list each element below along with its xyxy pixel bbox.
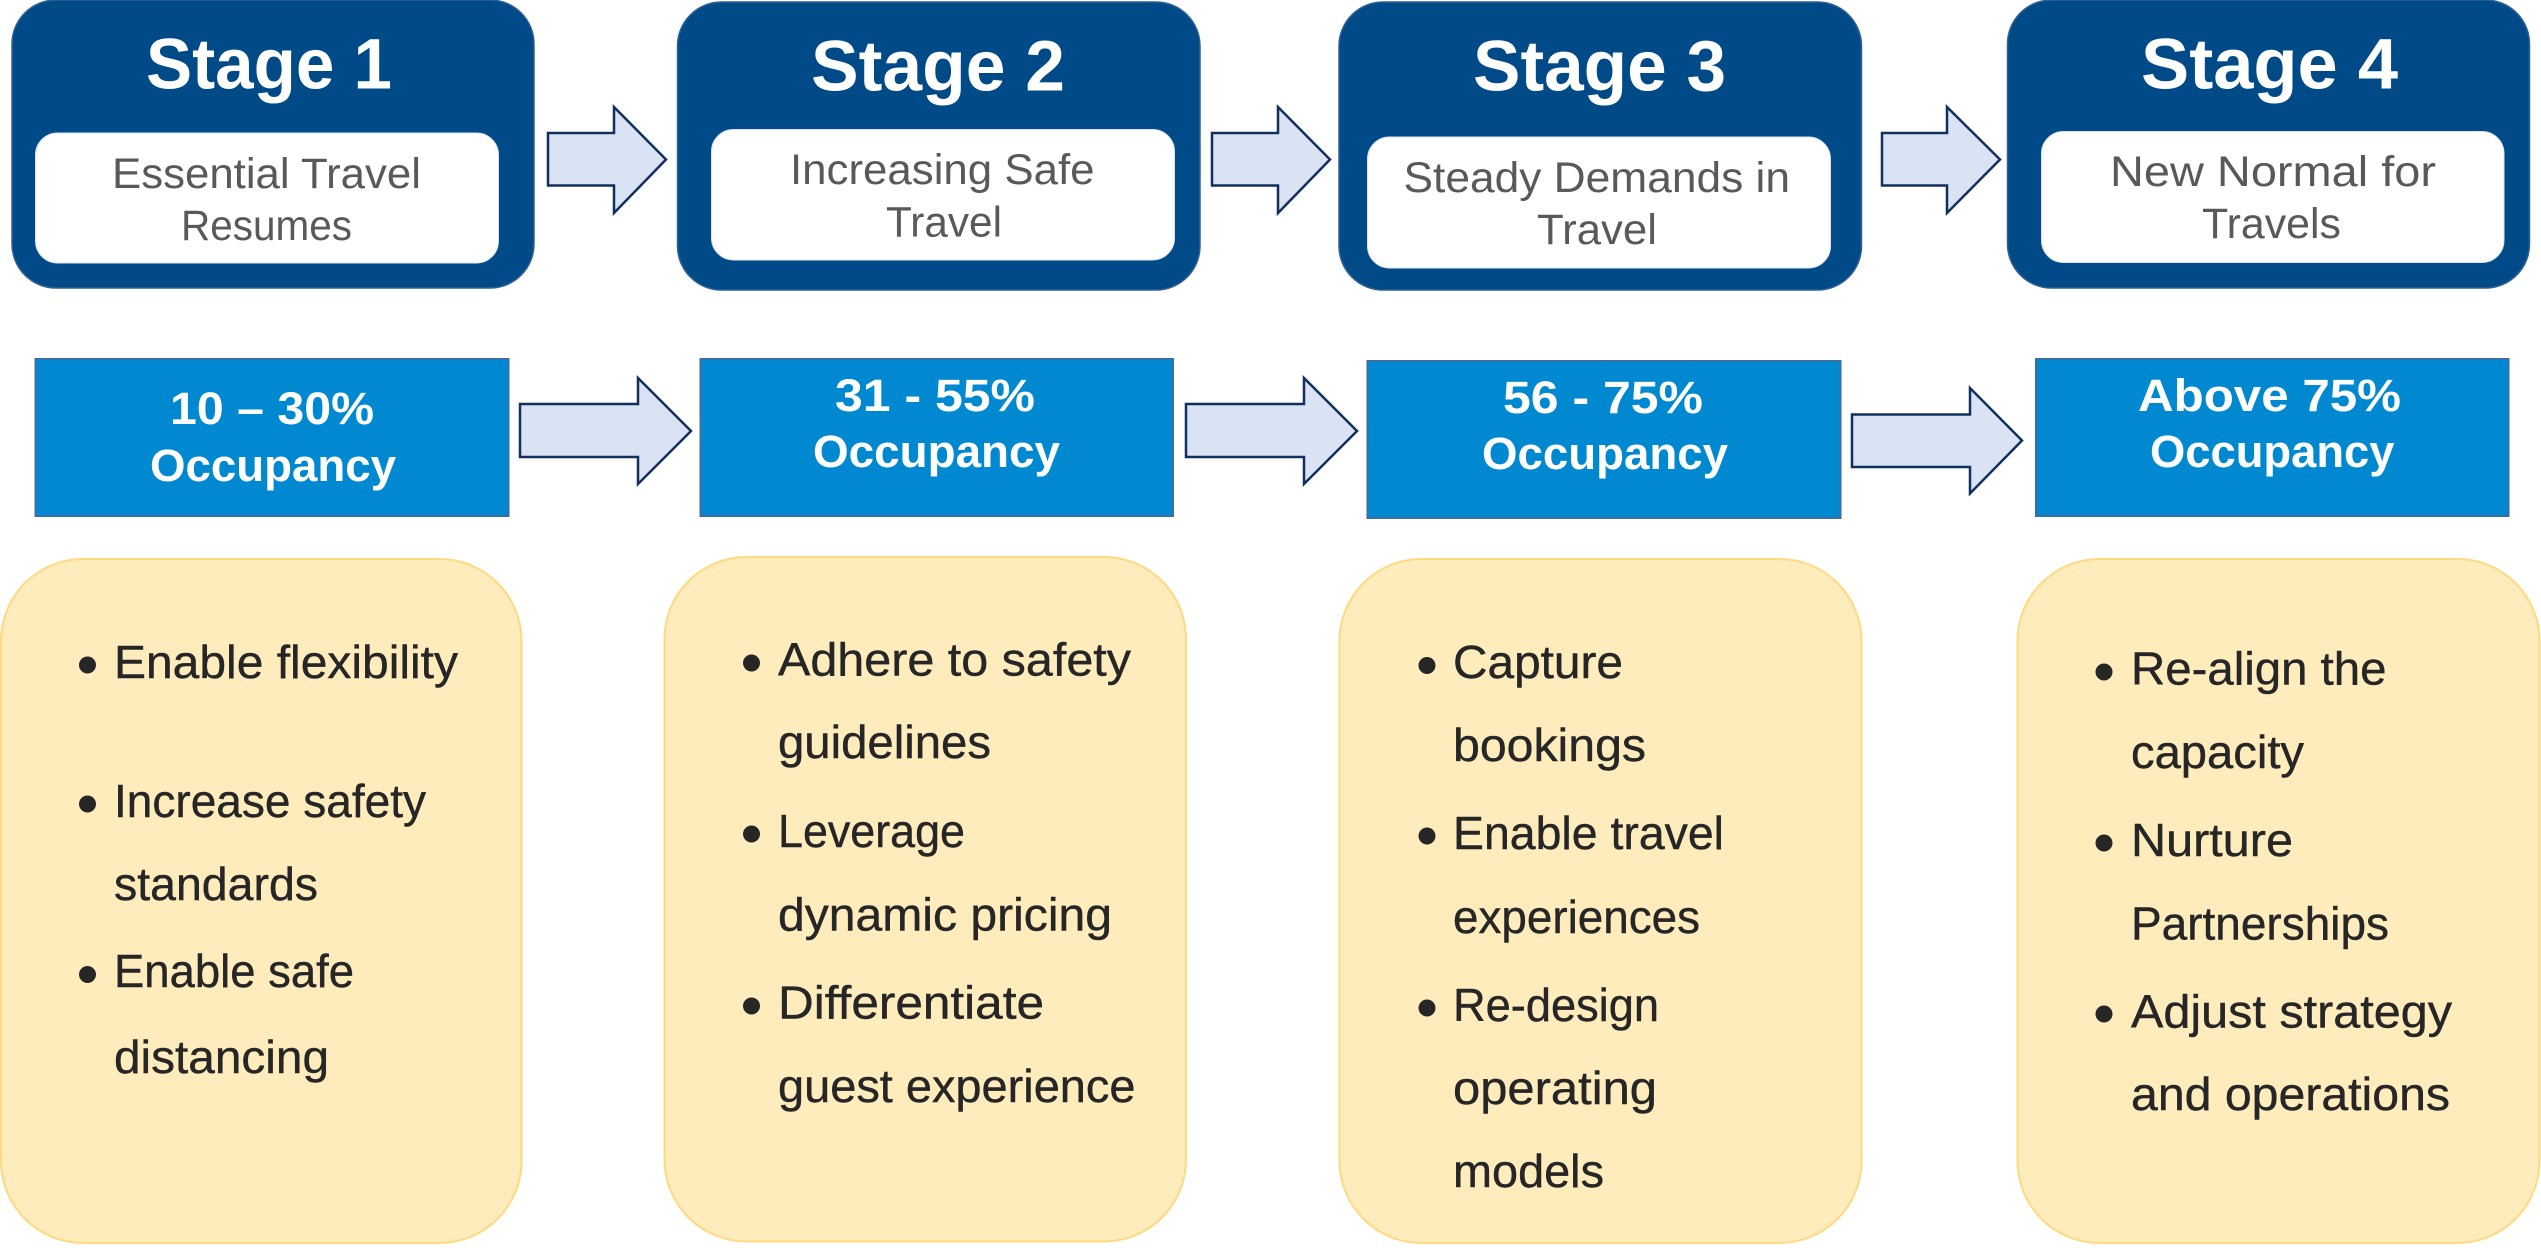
bullet: capture bookings xyxy=(1418,636,1646,771)
bullet: capture bookings: bookings xyxy=(1453,719,1646,771)
heading: stage 2: Stage 2 xyxy=(811,28,1065,106)
bullet: adjust strategy and operations: and operations xyxy=(2131,1068,2450,1120)
bullet: adhere to safety guidelines: Adhere to safety xyxy=(778,634,1131,686)
occupancy box: stage 2: 31 - 55% xyxy=(835,370,1035,421)
bullet: adjust strategy and operations: Adjust strategy xyxy=(2131,986,2452,1038)
subtitle card: stage 4: Travels xyxy=(2202,200,2341,248)
subtitle card: stage 4 xyxy=(2042,132,2504,262)
arrow: occupancy 2 to 3 xyxy=(1186,378,1357,484)
subtitle card: stage 2: Increasing Safe xyxy=(790,146,1094,194)
arrow: stage 1 to stage 2 xyxy=(548,107,666,213)
occupancy box: stage 1 xyxy=(36,359,508,516)
bullet: increase safety standards: standards xyxy=(114,858,318,910)
bullet: enable travel experiences: experiences xyxy=(1453,891,1700,943)
panel: stage 2 header xyxy=(678,2,1200,290)
bullet: enable travel experiences: Enable travel xyxy=(1453,807,1724,859)
occupancy box: stage 2 xyxy=(700,359,1173,516)
panel: stage 4 header xyxy=(2008,0,2530,288)
bullet: differentiate guest experience: Differentiate xyxy=(778,976,1044,1028)
bullet: re-design operating models: Re-design xyxy=(1453,979,1659,1031)
occupancy box: stage 4 xyxy=(2036,359,2508,516)
bullet: differentiate guest experience: guest experience xyxy=(778,1060,1136,1112)
panel: stage 2 actions xyxy=(664,557,1186,1242)
bullet: re-design operating models: models xyxy=(1453,1145,1604,1197)
bullet: re-align the capacity xyxy=(2096,642,2386,778)
occupancy box: stage 3: Occupancy xyxy=(1482,428,1728,479)
subtitle card: stage 2 xyxy=(712,130,1174,260)
panel: stage 3 header xyxy=(1339,2,1862,290)
subtitle card: stage 3: Steady Demands in xyxy=(1404,154,1790,202)
bullet: enable safe distancing: Enable safe xyxy=(114,945,354,997)
bullet: re-design operating models: operating xyxy=(1453,1062,1657,1114)
bullet: re-align the capacity: Re-align the xyxy=(2131,642,2386,694)
bullet: re-align the capacity: capacity xyxy=(2131,726,2304,778)
panel: stage 4 actions xyxy=(2018,559,2540,1243)
heading: stage 1: Stage 1 xyxy=(146,26,392,104)
bullet: re-design operating models xyxy=(1418,979,1659,1197)
arrow: stage 2 to stage 3 xyxy=(1212,107,1330,213)
bullet: enable travel experiences xyxy=(1418,807,1724,943)
occupancy box: stage 1: 10 – 30% xyxy=(170,383,374,434)
panel: stage 1 header xyxy=(12,0,534,288)
bullet: adhere to safety guidelines xyxy=(743,634,1131,768)
heading: stage 4: Stage 4 xyxy=(2141,26,2399,104)
bullet: increase safety standards xyxy=(79,775,426,910)
bullet: nurture partnerships: Partnerships xyxy=(2131,898,2389,950)
bullet: differentiate guest experience xyxy=(743,976,1136,1112)
subtitle card: stage 3 xyxy=(1368,137,1830,268)
bullet: enable safe distancing: distancing xyxy=(114,1031,329,1083)
occupancy box: stage 4: Occupancy xyxy=(2150,426,2394,477)
occupancy box: stage 1: Occupancy xyxy=(150,440,396,491)
occupancy box: stage 3: 56 - 75% xyxy=(1503,372,1703,423)
subtitle card: stage 2: Travel xyxy=(886,198,1002,246)
arrow: occupancy 3 to 4 xyxy=(1852,388,2022,494)
bullet: adjust strategy and operations xyxy=(2096,986,2452,1120)
subtitle card: stage 1: Essential Travel xyxy=(112,150,421,198)
bullet: capture bookings: Capture xyxy=(1453,636,1623,688)
bullet: leverage dynamic pricing: dynamic pricing xyxy=(778,888,1112,940)
bullet: nurture partnerships xyxy=(2096,814,2389,950)
arrow: stage 3 to stage 4 xyxy=(1882,107,2000,213)
occupancy box: stage 2: Occupancy xyxy=(813,426,1060,477)
bullet: leverage dynamic pricing xyxy=(743,805,1112,940)
arrow: occupancy 1 to 2 xyxy=(520,378,691,484)
subtitle card: stage 4: New Normal for xyxy=(2110,148,2436,196)
occupancy box: stage 3 xyxy=(1368,361,1840,518)
heading: stage 3: Stage 3 xyxy=(1473,28,1726,106)
bullet: increase safety standards: Increase safety xyxy=(114,775,426,827)
bullet: leverage dynamic pricing: Leverage xyxy=(778,805,965,857)
panel: stage 3 actions xyxy=(1340,559,1862,1243)
occupancy box: stage 4: Above 75% xyxy=(2138,370,2401,421)
bullet: nurture partnerships: Nurture xyxy=(2131,814,2293,866)
bullet: enable safe distancing xyxy=(79,945,354,1083)
subtitle card: stage 1: Resumes xyxy=(181,202,352,250)
subtitle card: stage 3: Travel xyxy=(1537,206,1657,254)
bullet: enable flexibility: Enable flexibility xyxy=(114,636,458,688)
bullet: adhere to safety guidelines: guidelines xyxy=(778,716,991,768)
subtitle card: stage 1 xyxy=(36,133,498,263)
panel: stage 1 actions xyxy=(1,559,522,1243)
